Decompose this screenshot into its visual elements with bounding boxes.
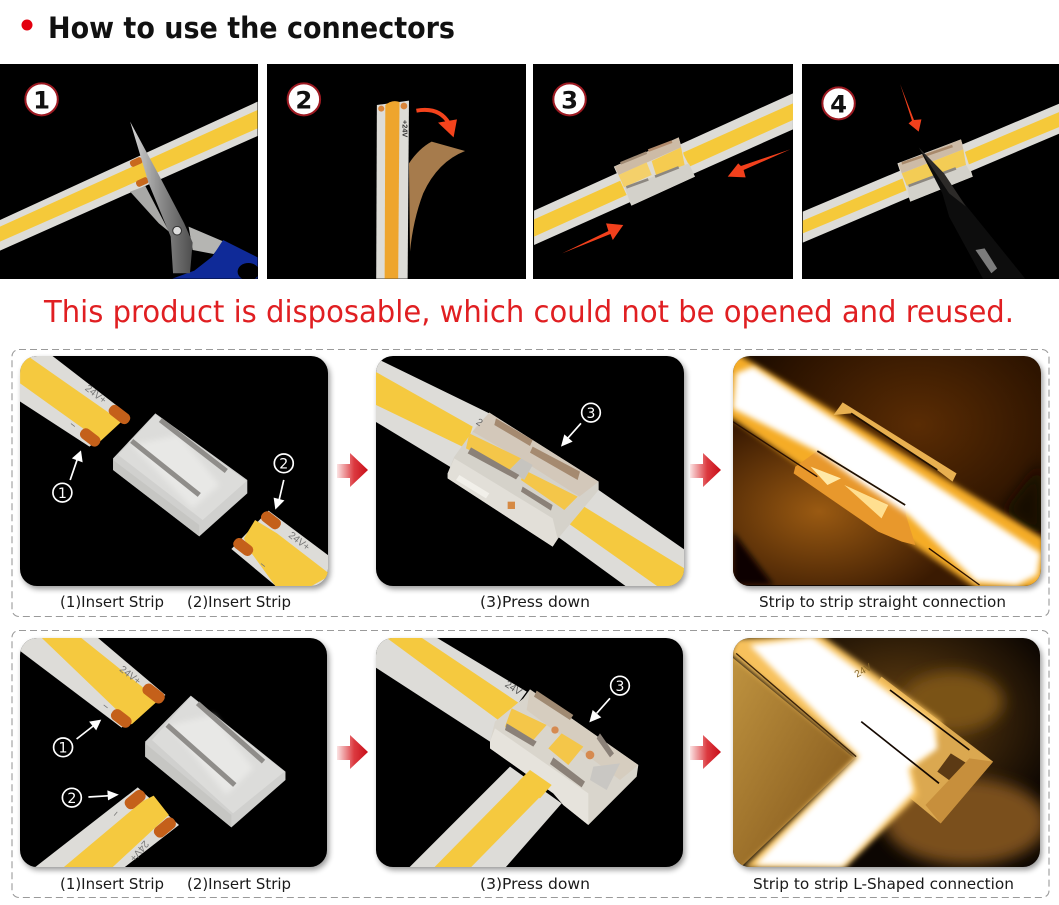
strip 2: 24V+	[286, 530, 312, 553]
lit connector pieces	[794, 402, 957, 545]
solder pads	[130, 157, 148, 187]
warning text: This product is disposable, which could not be opened and reused.	[43, 295, 1014, 330]
strip label: 2	[474, 417, 485, 429]
strip 2: −	[257, 560, 268, 572]
caption: (1)Insert Strip	[60, 593, 164, 611]
panel: straight connection frame	[10, 345, 1049, 616]
arrow: to step 3	[337, 453, 368, 487]
caption: (1)Insert Strip	[60, 875, 164, 893]
callout 2	[62, 788, 119, 807]
connector	[145, 696, 285, 827]
strip 2: −	[109, 807, 121, 819]
strip 1: −	[67, 420, 78, 432]
LED strip vertical: +24V	[401, 120, 410, 137]
caption: (3)Press down	[480, 593, 590, 611]
callout 1: 1	[59, 741, 68, 757]
step number 2: 2	[295, 86, 312, 114]
glow halo around strip	[729, 635, 942, 868]
step number 2	[288, 83, 320, 115]
strip 1	[10, 635, 167, 730]
strip label: 24V	[853, 662, 874, 680]
lit surface	[729, 655, 1047, 868]
white light band	[733, 367, 1040, 585]
strip 2	[232, 510, 328, 586]
icon: pliers	[919, 147, 1025, 279]
callout 1	[54, 720, 101, 757]
arrow: to result	[690, 735, 721, 769]
callout 3	[589, 676, 629, 722]
arrow: to result	[690, 453, 721, 487]
connector	[113, 413, 247, 536]
image: insert strips L	[10, 635, 327, 868]
callout 2: 2	[279, 457, 288, 473]
title: How to use the connectors	[48, 11, 455, 45]
callout 3: 3	[616, 679, 624, 695]
image: lit straight connection	[729, 355, 1044, 588]
bullet: red dot	[22, 20, 32, 30]
connector body	[838, 677, 993, 823]
step number 1: 1	[33, 86, 50, 114]
panel: step 3 insert into connector	[533, 64, 793, 279]
callout 2	[274, 454, 293, 510]
strip 1	[20, 356, 130, 447]
callout 1: 1	[58, 486, 67, 502]
strip 2: 24V+	[127, 838, 151, 863]
slits and edge lines	[736, 653, 969, 783]
image shadow row 1 C	[735, 359, 1043, 589]
slits and shadow lines	[733, 413, 980, 585]
panel: step 1 cut strip	[0, 64, 259, 280]
LED strip	[534, 93, 793, 245]
strip label: 24V	[503, 679, 524, 698]
glowing strip halo	[729, 355, 1044, 588]
panel: step 4 press with pliers	[802, 64, 1059, 279]
caption: (2)Insert Strip	[187, 875, 291, 893]
callout 3	[561, 403, 600, 447]
image shadow row 2 A	[22, 641, 329, 870]
callout 1	[53, 450, 83, 502]
image shadow row 2 C	[735, 641, 1042, 870]
caption: Strip to strip straight connection	[759, 593, 1006, 611]
arrow: to step 3	[337, 735, 368, 769]
image shadow row 1 A	[22, 359, 330, 589]
image: insert strips	[20, 356, 328, 586]
callout 2: 2	[67, 791, 76, 807]
strip 2	[34, 787, 179, 868]
caption: Strip to strip L-Shaped connection	[753, 875, 1014, 893]
connector	[614, 137, 695, 206]
lit surface	[733, 422, 1042, 585]
connector	[448, 413, 599, 547]
image shadow row 1 B	[378, 359, 686, 589]
image shadow row 2 B	[378, 641, 685, 870]
joined strip	[366, 353, 686, 590]
panel: L-shaped connection frame	[10, 630, 1049, 898]
strip arms	[373, 637, 562, 870]
arrow: press down	[900, 84, 921, 132]
strip 1: −	[99, 701, 111, 713]
connector	[490, 689, 638, 825]
image: lit L connection	[729, 635, 1047, 868]
strip 1: 24V+	[83, 383, 108, 406]
step number 4: 4	[830, 90, 847, 118]
arrow: push left	[728, 149, 790, 177]
icon: scissors	[130, 122, 259, 280]
LED strip vertical	[376, 101, 410, 279]
backing tape	[409, 142, 465, 252]
step number 4	[822, 87, 855, 119]
step number 1	[25, 83, 58, 115]
arrow: peel direction	[416, 110, 457, 137]
step number 3: 3	[561, 86, 578, 114]
panel: step 2 peel tape	[267, 64, 526, 279]
step number 3	[553, 83, 586, 115]
caption: (3)Press down	[480, 875, 590, 893]
strip 1: 24V+	[117, 664, 143, 687]
arrow: push right	[562, 223, 623, 253]
image: press down L	[373, 637, 683, 870]
callout 3: 3	[587, 406, 595, 422]
image: press down	[366, 353, 686, 590]
connector	[897, 139, 973, 202]
LED strip	[0, 102, 258, 251]
caption: (2)Insert Strip	[187, 593, 291, 611]
white L-shaped light	[750, 637, 937, 866]
LED strip	[803, 103, 1059, 243]
